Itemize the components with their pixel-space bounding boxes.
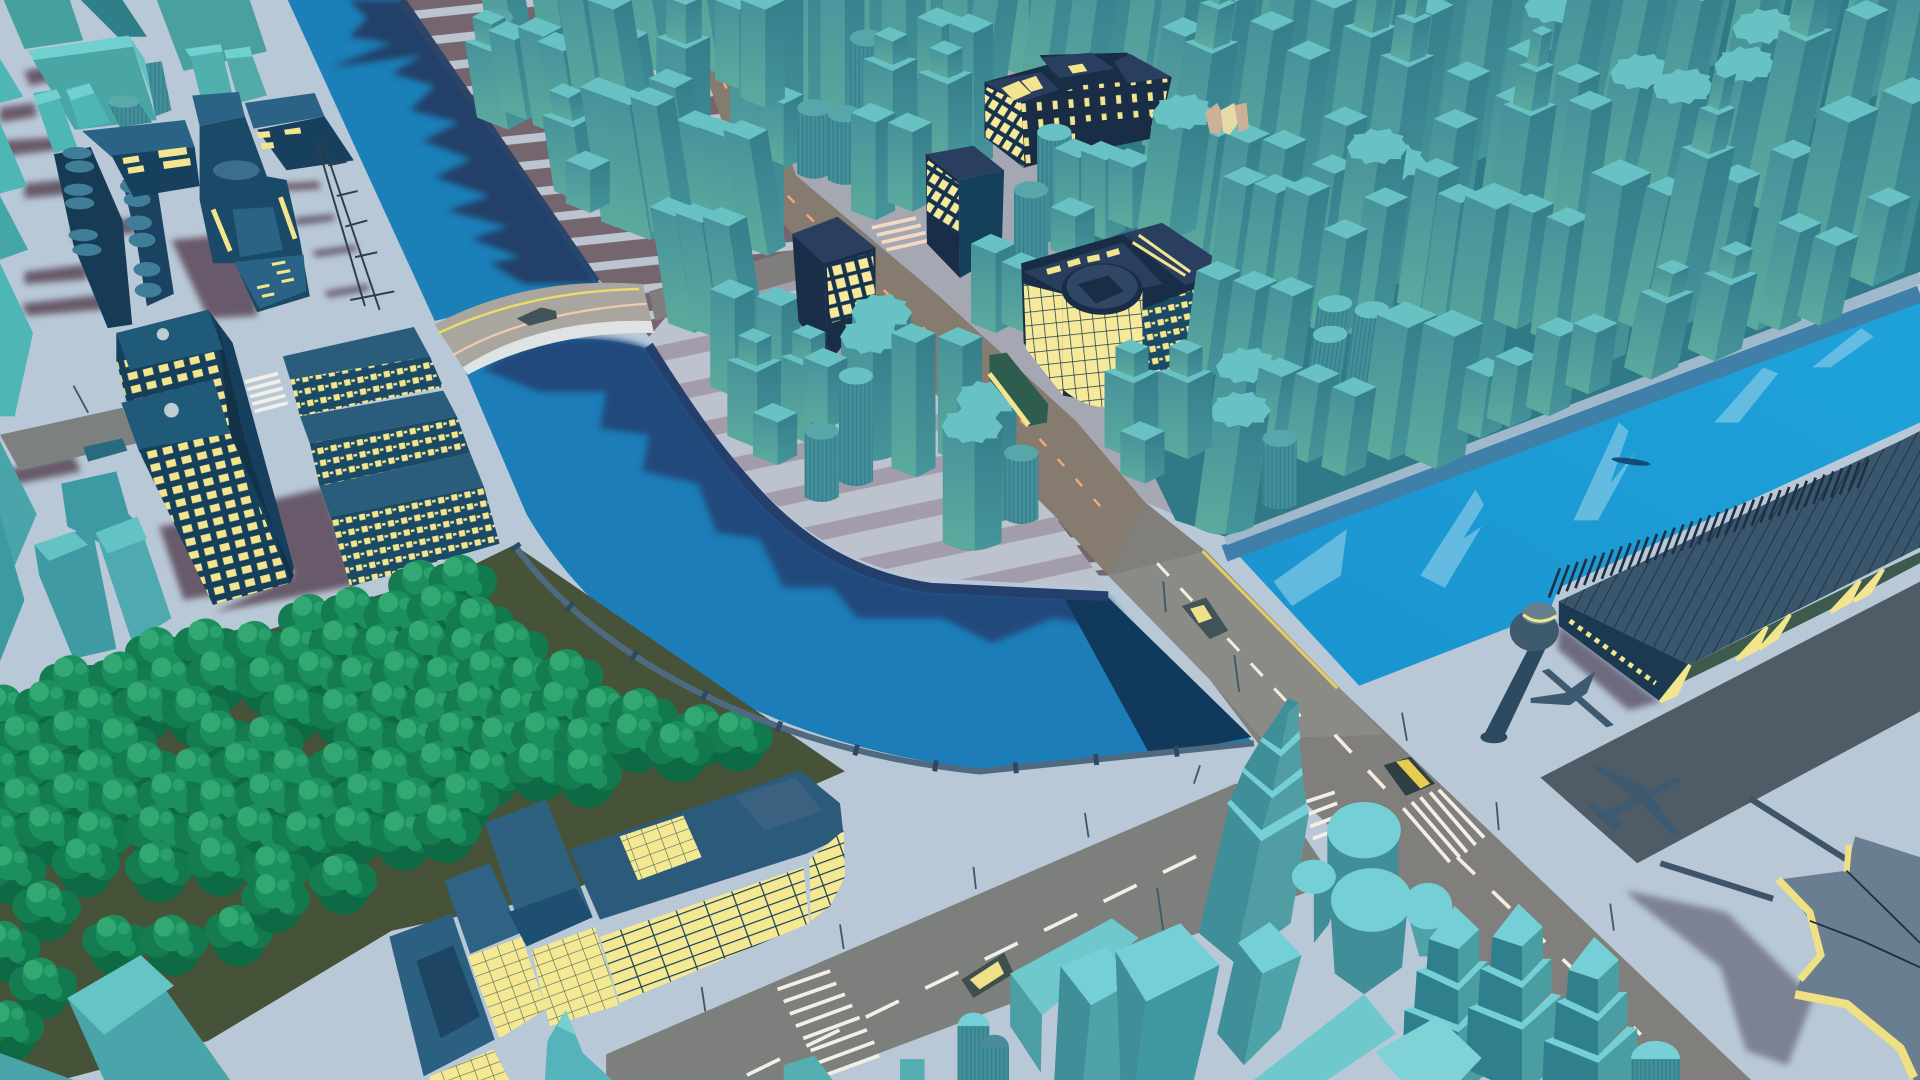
block: riverside ground: [649, 263, 1108, 588]
curved roof: [569, 770, 844, 920]
factory complex: north-west: [54, 92, 354, 328]
navy office block: cylinder tower: [1021, 223, 1227, 410]
end wall: [809, 830, 845, 921]
east wing: [245, 93, 324, 129]
road: west street: [0, 408, 137, 470]
towers: in front of north office block: [1014, 0, 1920, 284]
teal buildings: south centre: [784, 802, 1680, 1080]
river: east basin: [1237, 294, 1920, 686]
airport runway: [1540, 582, 1920, 863]
crosswalks: [245, 218, 1484, 1075]
glass panel bottom: [430, 1049, 509, 1080]
central slab: [485, 800, 593, 947]
left slab: [389, 913, 495, 1076]
small gear towers: [1631, 1041, 1680, 1078]
storage tanks: [54, 147, 132, 328]
towers: behind north office block: [1140, 0, 1726, 225]
glass panel left: [468, 937, 546, 1038]
towers: far city: [730, 0, 1369, 245]
roof skylights: [620, 816, 702, 880]
road: main avenue: [1041, 484, 1751, 1080]
roof oculus: [735, 778, 823, 830]
road markings: avenue centre line: [747, 842, 1224, 1075]
embankment walls: [402, 0, 1920, 596]
teal buildings: west edge: [0, 441, 171, 661]
stepped towers: [1402, 906, 1498, 1080]
bridge: north: [435, 283, 654, 375]
towers: riverside cluster: [727, 294, 1038, 550]
road: north avenue: [680, 0, 1145, 576]
teal buildings: north-west corner: [0, 0, 267, 416]
west wing: [82, 120, 195, 157]
plane: on runway: [1588, 764, 1681, 835]
glass panel right: [531, 927, 618, 1026]
park lawn: [0, 545, 845, 1080]
road: cross street: [649, 211, 940, 321]
teal building: south-west corner: [0, 955, 230, 1080]
towers: west city: [460, 0, 801, 397]
bus on avenue: [989, 353, 1048, 426]
river: main bend: [465, 338, 1251, 769]
navy office block: road corner: [792, 217, 876, 364]
red-roofed houses: [1205, 103, 1249, 135]
mid tower: [1238, 922, 1302, 973]
street lamps: [73, 386, 1614, 1011]
van on west street: [83, 438, 127, 462]
teal stepped tower: museum front: [545, 1010, 612, 1080]
navy tower: west twin: [116, 310, 294, 605]
block: centre city ground: [735, 0, 1298, 536]
road: bottom avenue: [606, 784, 1335, 1080]
teal skyscraper: central crossing: [1199, 698, 1309, 964]
power pylons: [317, 143, 394, 310]
park trees: [0, 555, 773, 1062]
ground shadows: west district: [0, 61, 370, 612]
car on north bridge: [517, 307, 557, 326]
fence along the river: [514, 545, 1254, 771]
main block: [200, 116, 310, 312]
gear towers: [1327, 830, 1398, 877]
low slabs: [1254, 994, 1396, 1080]
hangars: [1559, 431, 1920, 702]
navy office block: centre: [926, 146, 1004, 278]
cars: [961, 598, 1435, 998]
tower shadows on main bend: [484, 338, 1133, 643]
glazed wall: [600, 867, 809, 1003]
airport terminal: [1778, 836, 1920, 1080]
navy apartment blocks: west: [283, 327, 500, 587]
plane: parked near tower: [1531, 669, 1614, 727]
museum building: [389, 770, 845, 1080]
back slab: [444, 863, 520, 954]
tower shadows on north channel: [331, 0, 600, 284]
control tower: [1480, 602, 1559, 743]
slab pair: [1010, 918, 1139, 1015]
terminal shadow: [1626, 890, 1813, 1065]
towers: east rows: [1104, 0, 1920, 534]
block: east city base: [1078, 0, 1920, 536]
hangar shadow: [1558, 624, 1660, 710]
hangar fence: [1549, 459, 1869, 598]
towers: beside centre office block: [971, 234, 1046, 333]
block: west bank ground: [407, 0, 1108, 576]
river: north channel: [288, 0, 600, 321]
jet bridges: [1660, 798, 1847, 899]
navy office block: north: [984, 53, 1172, 168]
